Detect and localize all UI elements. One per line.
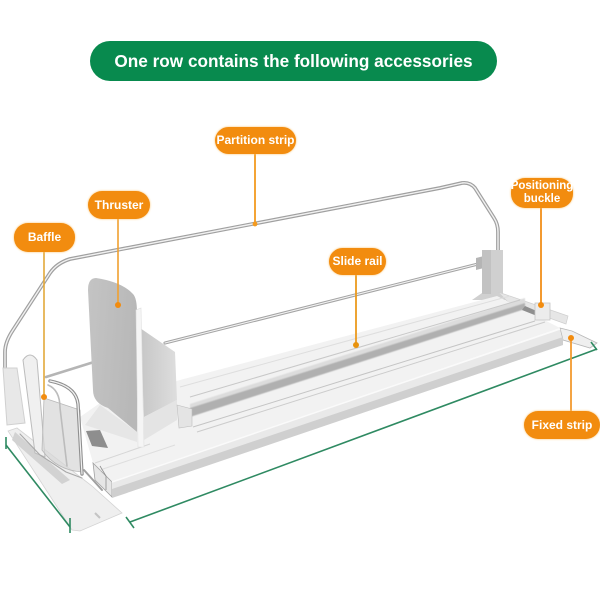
label: slide rail — [329, 248, 386, 275]
label: thruster — [88, 191, 150, 219]
dimension line: depth — [6, 437, 70, 533]
thruster — [85, 278, 192, 447]
fixed strip — [8, 292, 597, 531]
leader: slide rail — [353, 274, 359, 348]
label: fixed strip: Fixed strip — [532, 418, 592, 432]
partition strip wire — [5, 183, 498, 377]
leader: partition strip — [253, 152, 257, 226]
leader: fixed strip — [568, 335, 574, 412]
title — [90, 41, 497, 81]
label: positioning buckle: Positioning — [511, 180, 573, 192]
leader: baffle — [41, 250, 47, 400]
label: thruster: Thruster — [95, 198, 143, 212]
back rod — [165, 263, 482, 343]
label: positioning buckle — [511, 178, 573, 208]
positioning buckle part — [522, 303, 550, 320]
leader: positioning buckle — [538, 206, 544, 308]
leader: thruster — [115, 218, 121, 308]
label: baffle: Baffle — [28, 230, 61, 244]
dimension line: length — [126, 342, 597, 528]
label: partition strip — [215, 127, 296, 154]
slide rail body — [80, 296, 563, 498]
baffle — [3, 355, 102, 490]
right bracket — [472, 250, 508, 300]
label: fixed strip — [524, 411, 600, 439]
label: positioning buckle: buckle — [524, 193, 560, 205]
title: One row contains the following accessories — [114, 50, 473, 70]
label: slide rail: Slide rail — [332, 254, 383, 268]
label: baffle — [14, 223, 75, 252]
label: partition strip: Partition strip — [216, 133, 294, 147]
